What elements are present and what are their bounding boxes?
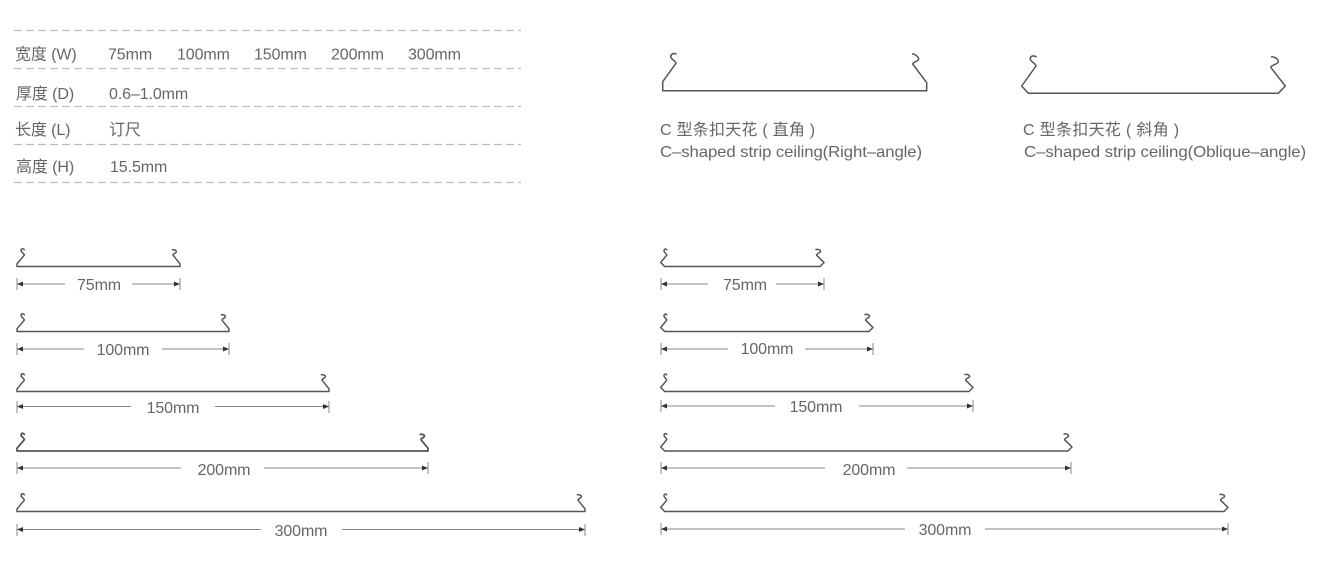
caption: oblique-angle: C 型条扣天花 ( 斜角 ): [1023, 121, 1179, 139]
caption: oblique-angle: [1023, 121, 1306, 161]
caption: right-angle: C–shaped strip ceiling(Right–angle): [660, 144, 922, 161]
200mm right-angle: [17, 433, 428, 479]
row: height: 15.5mm: [110, 159, 167, 176]
100mm right-angle: 100mm: [97, 342, 149, 359]
300mm oblique-angle: 300mm: [919, 522, 971, 539]
150mm oblique-angle: 150mm: [790, 399, 842, 416]
75mm right-angle: 75mm: [77, 277, 121, 294]
row: width: 75mm: [108, 46, 152, 64]
row: thickness: [16, 85, 188, 103]
300mm oblique-angle: [661, 494, 1228, 539]
row: length: 订尺: [109, 121, 141, 139]
100mm oblique-angle: 100mm: [741, 341, 793, 358]
row: height: [16, 158, 167, 176]
row: thickness: 0.6–1.0mm: [109, 86, 188, 103]
100mm right-angle: [17, 314, 229, 359]
row: width: 200mm: [331, 46, 384, 64]
150mm right-angle: [17, 374, 329, 417]
row: width: 150mm: [254, 46, 307, 64]
oblique-angle profile large: [1022, 56, 1285, 93]
caption: right-angle: C 型条扣天花 ( 直角 ): [660, 121, 815, 139]
spec table: [14, 30, 521, 182]
right-angle profile large: [663, 54, 927, 91]
200mm oblique-angle: 200mm: [843, 462, 895, 479]
caption: oblique-angle: C–shaped strip ceiling(Oblique–angle): [1024, 144, 1306, 161]
row: thickness: 厚度 (D): [16, 85, 74, 103]
oblique-angle sizes: [661, 249, 1228, 539]
row: length: 长度 (L): [15, 121, 70, 139]
75mm oblique-angle: [661, 249, 824, 294]
100mm oblique-angle: [661, 314, 873, 358]
150mm oblique-angle: [661, 374, 973, 416]
row: height: 高度 (H): [16, 158, 74, 176]
150mm right-angle: 150mm: [147, 400, 199, 417]
300mm right-angle: [17, 494, 585, 540]
200mm right-angle: 200mm: [198, 462, 250, 479]
75mm right-angle: [17, 249, 180, 294]
row: width: 100mm: [177, 46, 230, 64]
caption: right-angle: [660, 121, 922, 161]
200mm oblique-angle: [661, 434, 1072, 479]
row: width: [15, 46, 461, 64]
75mm oblique-angle: 75mm: [723, 277, 767, 294]
300mm right-angle: 300mm: [275, 523, 327, 540]
row: width: 300mm: [408, 46, 461, 64]
right-angle sizes: [17, 249, 585, 540]
row: width: 宽度 (W): [15, 46, 77, 64]
row: length: [15, 121, 141, 139]
